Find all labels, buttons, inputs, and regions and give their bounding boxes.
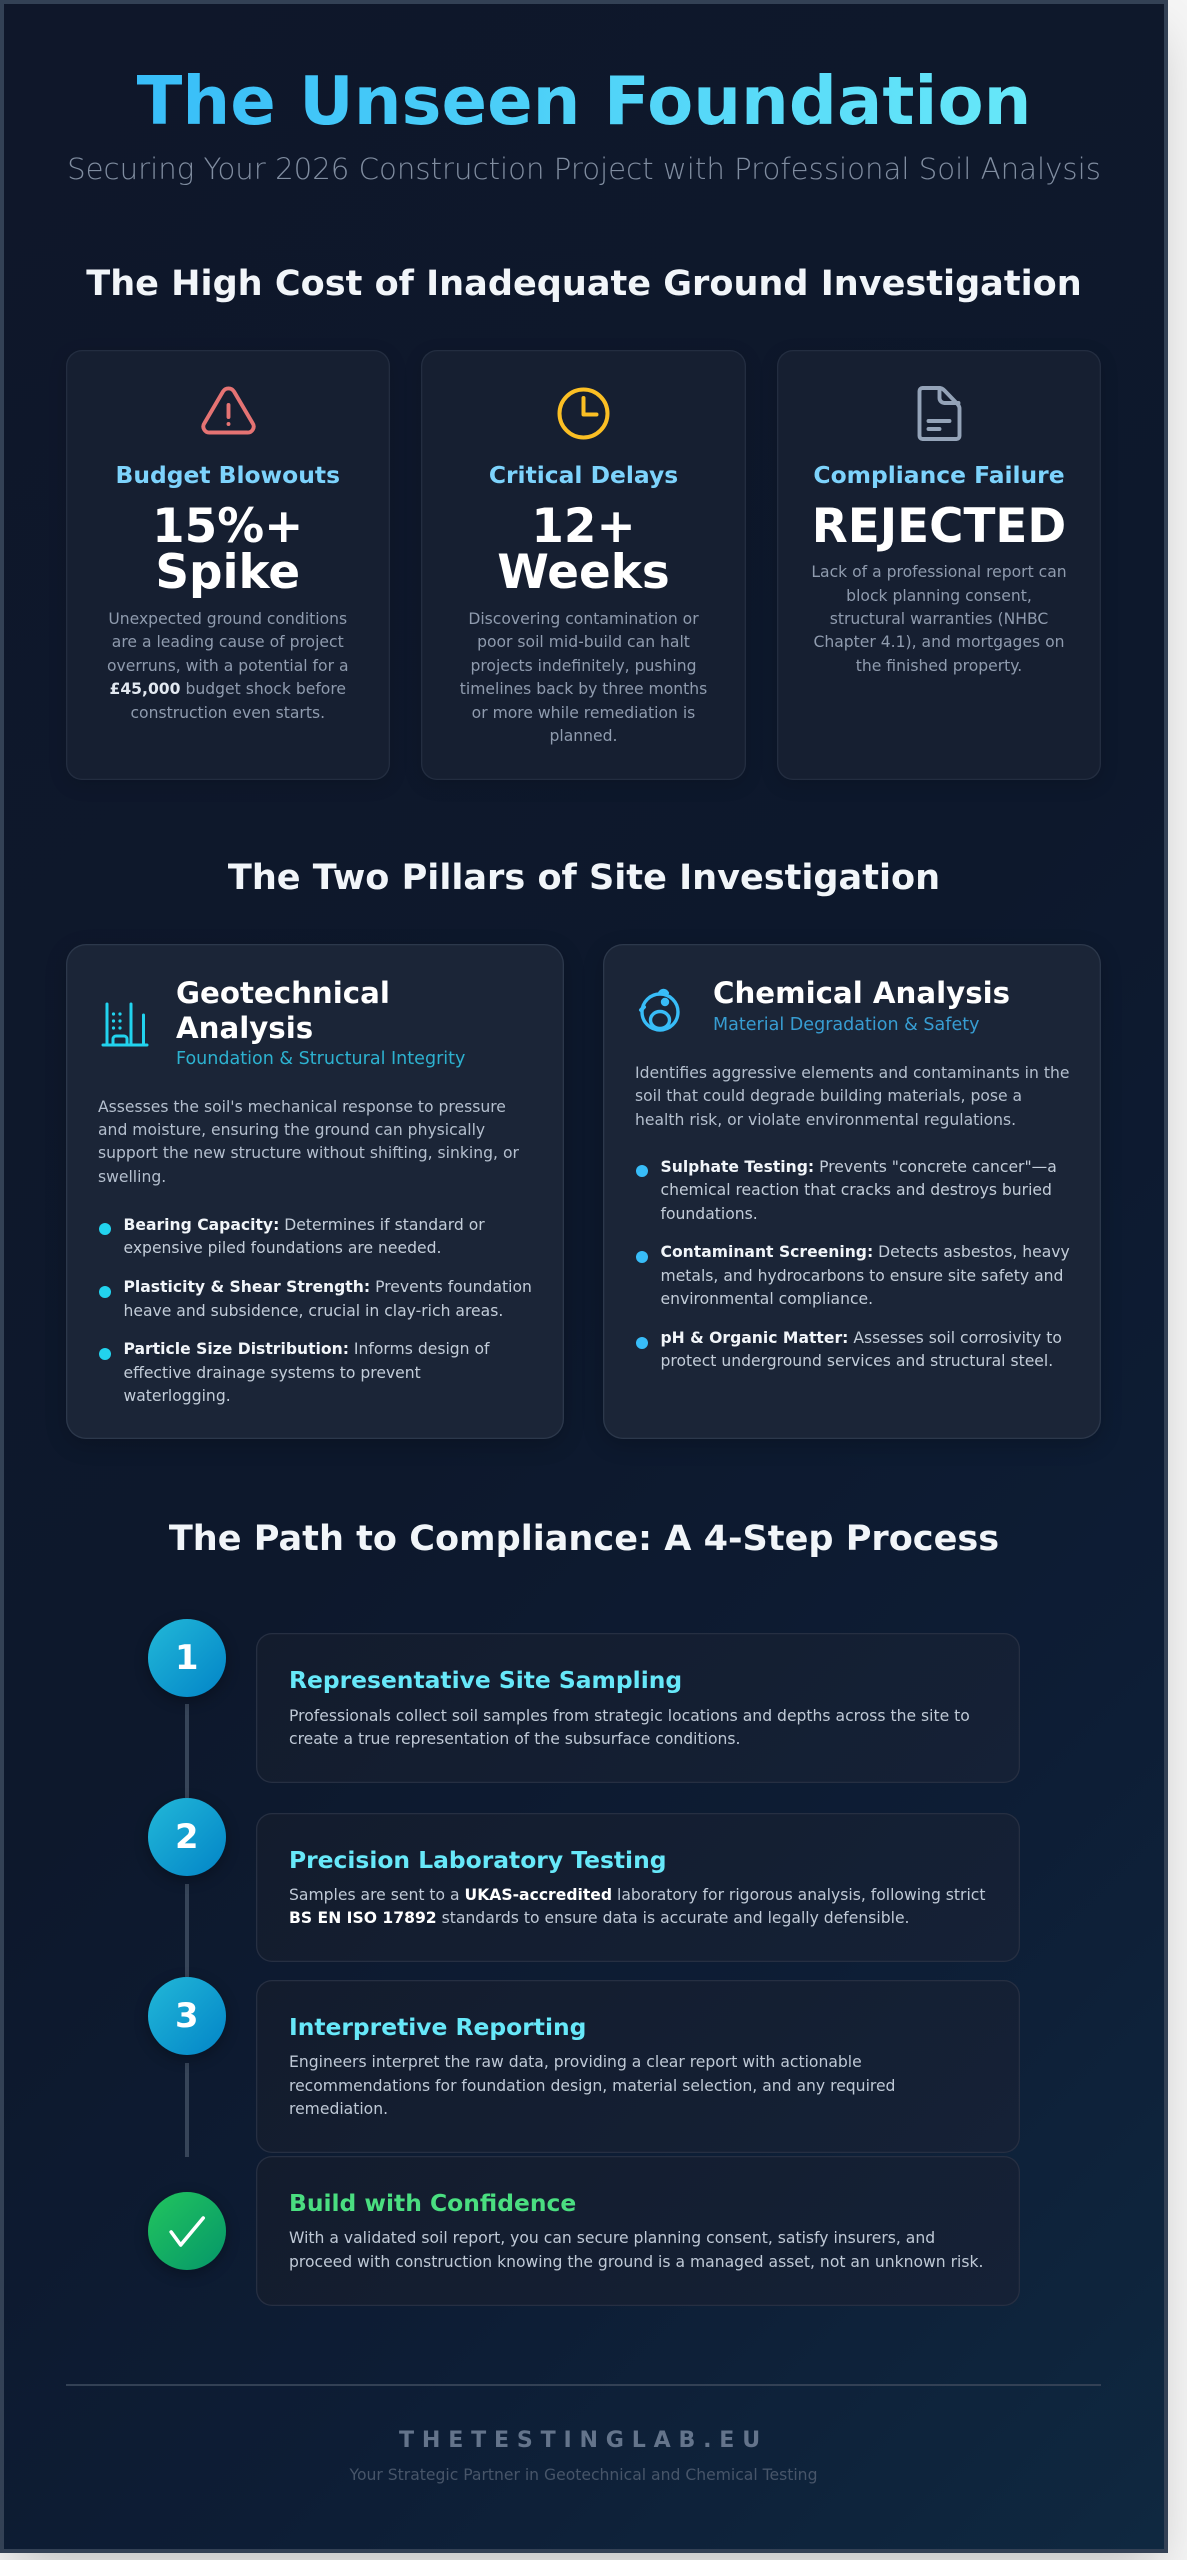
big stat: 15%+	[152, 500, 303, 554]
step 1 card	[256, 1633, 1020, 1783]
connector line 2	[185, 1884, 189, 1977]
step text: Samples are sent to a UKAS-accredited laboratory for rigorous analysis, following strict	[289, 1886, 985, 1904]
card description: overruns, with a potential for a	[107, 657, 349, 675]
card title: Compliance Failure	[813, 461, 1065, 489]
footer	[66, 2384, 1101, 2504]
card description: or more while remediation is	[472, 704, 695, 722]
bullet: plasticity: heave and subsidence, crucial in clay-rich areas.	[124, 1302, 503, 1320]
step text: Professionals collect soil samples from strategic locations and depths across the site to	[289, 1707, 970, 1725]
step 2 badge: 2	[175, 1817, 199, 1856]
icon: building	[102, 1002, 148, 1046]
step text: With a validated soil report, you can secure planning consent, satisfy insurers, and	[289, 2229, 935, 2247]
step 4 badge: check	[148, 2192, 226, 2270]
step text: create a true representation of the subsurface conditions.	[289, 1730, 740, 1748]
bullet: particle size	[124, 1340, 490, 1405]
bullet dot	[636, 1251, 648, 1263]
card description	[460, 610, 707, 745]
bullet: plasticity: Plasticity & Shear Strength: Prevents foundation	[124, 1278, 532, 1296]
card description: construction even starts.	[130, 704, 325, 722]
footer brand: THETESTINGLAB.EU	[399, 2427, 768, 2453]
panel: budget blowouts	[66, 350, 390, 780]
bullet: contaminant: metals, and hydrocarbons to ensure site safety and	[660, 1267, 1063, 1285]
card title: Budget Blowouts	[115, 461, 340, 489]
panel title: Geotechnical	[176, 976, 390, 1010]
bullet: contaminant: Contaminant Screening: Detects asbestos, heavy	[660, 1243, 1070, 1261]
bullet: bearing capacity	[124, 1216, 485, 1257]
bullet: pH: pH & Organic Matter: Assesses soil corrosivity to	[660, 1329, 1062, 1347]
step title: Build with Confidence	[289, 2189, 576, 2217]
bullet: bearing capacity: expensive piled foundations are needed.	[124, 1239, 441, 1257]
bullet: bearing capacity: Bearing Capacity: Determines if standard or	[124, 1216, 485, 1234]
card description: poor soil mid-build can halt	[477, 633, 690, 651]
panel description	[635, 1064, 1069, 1129]
bullet dot	[636, 1337, 648, 1349]
panel subtitle: Material Degradation & Safety	[713, 1015, 980, 1035]
step 3 card	[256, 1980, 1020, 2153]
bullet dot	[99, 1286, 111, 1298]
step text	[289, 1707, 970, 1748]
title: The Unseen Foundation	[137, 62, 1031, 140]
card description: £45,000 budget shock before	[109, 680, 346, 698]
panel title: Chemical Analysis	[713, 976, 1010, 1010]
step text: BS EN ISO 17892 standards to ensure data is accurate and legally defensible.	[289, 1909, 910, 1927]
step 2 card	[256, 1813, 1020, 1962]
step text: proceed with construction knowing the ground is a managed asset, not an unknown risk.	[289, 2253, 984, 2271]
card description: projects indefinitely, pushing	[470, 657, 697, 675]
card description: Lack of a professional report can	[811, 563, 1067, 581]
connector line 3	[185, 2063, 189, 2157]
icon: clock	[558, 388, 610, 440]
panel description: support the new structure without shifting, sinking, or	[98, 1144, 519, 1162]
card description: planned.	[549, 727, 618, 745]
bullet dot	[99, 1223, 111, 1235]
panel: chemical analysis	[603, 944, 1101, 1439]
icon: document	[918, 386, 962, 441]
step 1 badge	[148, 1619, 226, 1697]
step 4 card	[256, 2156, 1020, 2306]
heading: path to compliance: The Path to Compliance: A 4-Step Process	[169, 1518, 999, 1558]
bullet: contaminant	[660, 1243, 1070, 1308]
big stat	[152, 500, 303, 600]
step 3 badge: 3	[175, 1996, 199, 2035]
step text	[289, 2229, 984, 2271]
bullet: pH	[660, 1329, 1062, 1370]
big stat: Spike	[155, 546, 300, 600]
panel title	[176, 976, 390, 1044]
panel description: swelling.	[98, 1168, 166, 1186]
bullet dot	[636, 1165, 648, 1177]
card description: block planning consent,	[846, 587, 1032, 605]
bullet dot	[99, 1348, 111, 1360]
footer tagline: Your Strategic Partner in Geotechnical and Chemical Testing	[350, 2466, 817, 2484]
panel: critical delays	[421, 350, 746, 780]
panel description	[98, 1098, 519, 1186]
step text: Engineers interpret the raw data, providing a clear report with actionable	[289, 2053, 862, 2071]
step 3 badge	[148, 1977, 226, 2055]
big stat: REJECTED	[812, 500, 1066, 554]
card description	[811, 563, 1067, 675]
heading: high cost: The High Cost of Inadequate Ground Investigation	[86, 262, 1082, 304]
panel description: and moisture, ensuring the ground can physically	[98, 1121, 485, 1139]
icon: warning triangle	[201, 386, 256, 434]
card description: are a leading cause of project	[112, 633, 344, 651]
step title: Representative Site Sampling	[289, 1666, 682, 1694]
subtitle: Securing Your 2026 Construction Project with Professional Soil Analysis	[67, 152, 1101, 186]
card description: timelines back by three months	[460, 680, 707, 698]
panel description: health risk, or violate environmental regulations.	[635, 1111, 1016, 1129]
bullet: sulphate	[660, 1158, 1057, 1223]
card description: Chapter 4.1), and mortgages on	[813, 633, 1065, 651]
panel title: Analysis	[176, 1010, 313, 1044]
step title: Interpretive Reporting	[289, 2013, 586, 2041]
bullet: particle size: effective drainage systems to prevent	[124, 1364, 421, 1382]
card description: the finished property.	[856, 657, 1022, 675]
bullet: particle size: Particle Size Distribution: Informs design of	[124, 1340, 490, 1358]
card description: structural warranties (NHBC	[830, 610, 1048, 628]
panel description: soil that could degrade building materials, pose a	[635, 1087, 1022, 1105]
bullet: pH: protect underground services and structural steel.	[660, 1352, 1053, 1370]
card title: Critical Delays	[489, 461, 678, 489]
icon: chemical	[638, 988, 680, 1032]
panel description: Identifies aggressive elements and contaminants in the	[635, 1064, 1069, 1082]
step text	[289, 2053, 895, 2118]
bullet: sulphate: Sulphate Testing: Prevents "concrete cancer"—a	[660, 1158, 1057, 1176]
bullet: particle size: waterlogging.	[124, 1387, 231, 1405]
big stat	[497, 500, 670, 600]
card description: Unexpected ground conditions	[108, 610, 347, 628]
step title: Precision Laboratory Testing	[289, 1846, 666, 1874]
bullet: plasticity	[124, 1278, 532, 1320]
step 2 badge	[148, 1798, 226, 1876]
connector line 1	[185, 1704, 189, 1798]
step 1 badge: 1	[175, 1638, 199, 1677]
card description	[107, 610, 349, 722]
bullet: sulphate: chemical reaction that cracks and destroys buried	[660, 1181, 1052, 1199]
panel: geotechnical analysis	[66, 944, 564, 1439]
bullet: sulphate: foundations.	[660, 1205, 758, 1223]
panel subtitle: Foundation & Structural Integrity	[176, 1049, 465, 1069]
heading: two pillars: The Two Pillars of Site Investigation	[228, 856, 940, 898]
big stat: Weeks	[497, 546, 670, 600]
card description: Discovering contamination or	[468, 610, 699, 628]
step text	[289, 1886, 986, 1927]
big stat: 12+	[531, 500, 636, 554]
panel description: Assesses the soil's mechanical response to pressure	[98, 1098, 506, 1116]
panel: compliance failure	[777, 350, 1101, 780]
step text: recommendations for foundation design, material selection, and any required	[289, 2077, 895, 2095]
step text: remediation.	[289, 2100, 388, 2118]
bullet: contaminant: environmental compliance.	[660, 1290, 873, 1308]
icon: check mark	[169, 2216, 206, 2247]
